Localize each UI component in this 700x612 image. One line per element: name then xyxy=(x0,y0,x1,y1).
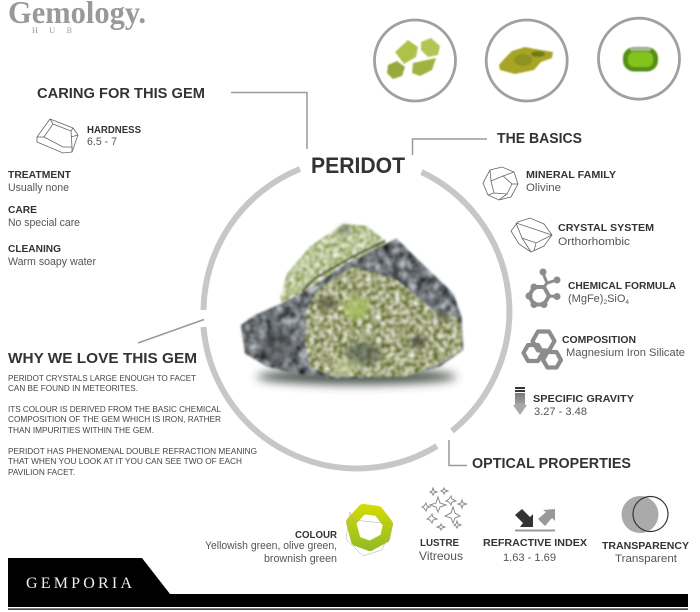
text: chemical formula xyxy=(568,281,676,306)
text: hardness: HARDNESS xyxy=(87,125,141,136)
text: crystal system: Orthorhombic xyxy=(558,236,631,248)
text: why we love paragraphs: COMPOSITION OF THE GEM WHICH IS IRON, RATHER xyxy=(8,414,221,424)
text: crystal system xyxy=(558,223,654,248)
connector: basics to title xyxy=(412,139,487,155)
text: lustre: LUSTRE xyxy=(420,538,459,549)
icon: chemical formula molecule xyxy=(526,269,560,308)
text: crystal system: CRYSTAL SYSTEM xyxy=(558,223,654,234)
ring around rock xyxy=(204,169,509,468)
text: lustre xyxy=(419,538,463,563)
text: refractive index: REFRACTIVE INDEX xyxy=(483,538,587,549)
icon: hardness crystal xyxy=(37,119,78,153)
text: colour xyxy=(205,530,338,565)
text: chemical formula: (MgFe) xyxy=(568,293,603,305)
text: colour: COLOUR xyxy=(295,530,338,541)
icon: mineral family xyxy=(483,167,518,200)
text: refractive index: 1.63 - 1.69 xyxy=(503,552,556,564)
text: specific gravity: 3.27 - 3.48 xyxy=(534,406,587,418)
text: why we love paragraphs xyxy=(8,373,257,477)
text: transparency: TRANSPARENCY xyxy=(602,541,689,552)
text: why we love paragraphs: PERIDOT CRYSTALS LARGE ENOUGH TO FACET xyxy=(8,373,196,383)
text: why we love paragraphs: CAN BE FOUND IN METEORITES. xyxy=(8,383,138,393)
heading: optical properties: OPTICAL PROPERTIES xyxy=(472,456,631,472)
icon: composition hexagons xyxy=(524,332,561,368)
icon: lustre sparkles xyxy=(422,488,467,530)
text: transparency: Transparent xyxy=(615,553,677,565)
text: cleaning xyxy=(8,244,96,268)
text: chemical formula: 2 xyxy=(603,299,607,306)
text: colour: brownish green xyxy=(264,553,337,565)
text: why we love paragraphs: ITS COLOUR IS DERIVED FROM THE BASIC CHEMICAL xyxy=(8,404,221,414)
text: specific gravity xyxy=(533,394,634,418)
text: why we love paragraphs: THAN IMPURITIES WITHIN THE GEM. xyxy=(8,425,154,435)
text: why we love paragraphs: PAVILION FACET. xyxy=(8,467,75,477)
text: hardness: 6.5 - 7 xyxy=(87,136,117,148)
icon: specific gravity arrow xyxy=(513,387,527,415)
text: chemical formula: 4 xyxy=(625,299,629,306)
text: refractive index xyxy=(483,538,587,564)
photo: peridot rock xyxy=(241,224,463,385)
text: cleaning: Warm soapy water xyxy=(8,256,96,268)
logo: Gemology Hub: HUB xyxy=(32,26,72,35)
text: composition: COMPOSITION xyxy=(562,335,636,346)
text: lustre: Vitreous xyxy=(419,549,463,563)
text: mineral family: Olivine xyxy=(526,182,561,194)
text: cleaning: CLEANING xyxy=(8,244,61,255)
title: PERIDOT xyxy=(311,153,406,178)
text: care: No special care xyxy=(8,217,80,229)
text: treatment xyxy=(8,170,71,194)
heading: the basics: THE BASICS xyxy=(497,131,582,147)
text: transparency xyxy=(602,541,689,565)
icon: colour ring xyxy=(346,509,393,556)
text: why we love paragraphs: THAT WHEN YOU LOOK AT IT YOU CAN SEE TWO OF EACH xyxy=(8,456,242,466)
connector: caring to title xyxy=(231,92,307,149)
heading: caring for this gem: CARING FOR THIS GEM xyxy=(37,86,205,102)
icon: refractive index arrows xyxy=(515,509,555,530)
icon: crystal system xyxy=(511,218,552,252)
connector: why we love to ring xyxy=(138,320,204,343)
heading: why we love this gem: WHY WE LOVE THIS GEM xyxy=(8,350,197,367)
icon: transparency circles xyxy=(622,496,668,533)
text: composition: Magnesium Iron Silicate xyxy=(566,347,685,359)
text: why we love paragraphs: PERIDOT HAS PHENOMENAL DOUBLE REFRACTION MEANING xyxy=(8,446,257,456)
text: colour: Yellowish green, olive green, xyxy=(205,540,337,552)
text: mineral family xyxy=(526,170,616,194)
text: composition xyxy=(562,335,685,359)
text: specific gravity: SPECIFIC GRAVITY xyxy=(533,394,634,405)
text: mineral family: MINERAL FAMILY xyxy=(526,170,616,181)
text: treatment: TREATMENT xyxy=(8,170,71,181)
text: hardness xyxy=(87,125,141,148)
text: chemical formula: SiO xyxy=(607,293,626,305)
footer band: Gemporia: GEMPORIA xyxy=(26,575,132,592)
text: care: CARE xyxy=(8,205,37,216)
photo: rough peridot crystals xyxy=(374,20,456,101)
photo: rough peridot pebble xyxy=(486,20,567,101)
footer band: Gemporia xyxy=(8,558,688,610)
dark and light patches on rock xyxy=(258,227,452,373)
text: chemical formula: CHEMICAL FORMULA xyxy=(568,281,676,292)
photo: cut peridot gem xyxy=(598,18,680,99)
text: treatment: Usually none xyxy=(8,182,69,194)
connector: optical properties xyxy=(449,440,467,466)
text: care xyxy=(8,205,80,229)
